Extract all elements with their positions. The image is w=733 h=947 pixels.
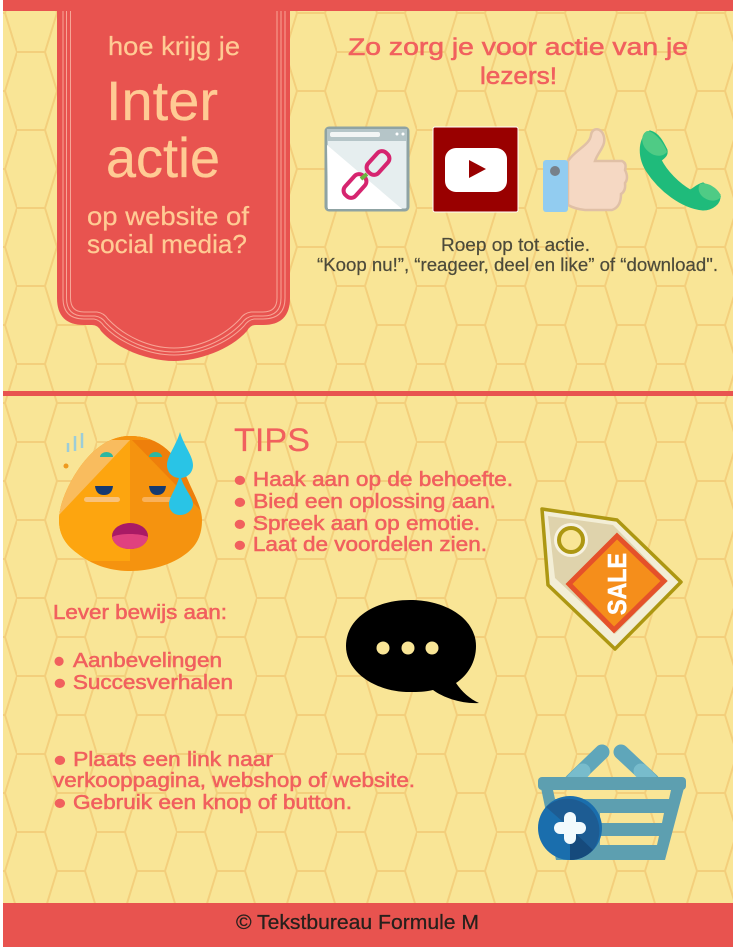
- heading: actie: Zo zorg je voor actie van je: [348, 34, 688, 61]
- heading: actie: [348, 34, 688, 90]
- copyright: © Tekstbureau Formule M: [236, 912, 479, 934]
- icon: sale tag: [542, 509, 681, 649]
- link text: ● Gebruik een knop of button.: [53, 792, 352, 814]
- icon: speech bubble: [346, 600, 479, 703]
- caption: roep op tot actie: Roep op tot actie.: [441, 235, 590, 255]
- link text: verkooppagina, webshop of website.: [53, 770, 415, 792]
- caption: roep op tot actie: [317, 235, 718, 275]
- top bar: [3, 0, 733, 11]
- banner heading: hoe krijg je: [108, 31, 240, 61]
- banner heading: op website of: [87, 201, 250, 231]
- icon: sale tag: SALE: [602, 553, 632, 615]
- section divider: [3, 391, 733, 396]
- icon: shopping basket: [538, 752, 686, 860]
- proof text: ● Succesverhalen: [53, 672, 233, 694]
- footer: [3, 903, 733, 947]
- proof text: Lever bewijs aan:: [53, 602, 227, 624]
- proof text: [53, 602, 233, 694]
- banner: [57, 11, 290, 361]
- proof text: Aanbevelingen: [73, 650, 222, 672]
- icon: thumbs up: [543, 129, 627, 212]
- tips list: ● Spreek aan op emotie.: [233, 513, 480, 535]
- caption: roep op tot actie: “Koop nu!”, “reageer, deel en like” of “download".: [317, 255, 718, 275]
- banner heading: social media?: [87, 229, 247, 259]
- link text: [53, 749, 415, 814]
- tips heading: TIPS: [234, 422, 310, 458]
- icon: phone: [641, 131, 721, 209]
- banner heading: [87, 31, 250, 259]
- tips list: [233, 469, 513, 556]
- icon: sweating face: [55, 430, 205, 571]
- tips list: ● Laat de voordelen zien.: [233, 534, 487, 556]
- link text: ● Plaats een link naar: [53, 749, 273, 771]
- tips list: ● Bied een oplossing aan.: [233, 491, 496, 513]
- banner heading: Inter: [106, 69, 218, 132]
- tips list: ● Haak aan op de behoefte.: [233, 469, 513, 491]
- tips: [233, 422, 513, 556]
- banner heading: actie: [106, 126, 220, 189]
- icon: video play: [433, 127, 518, 212]
- icon: browser link: [326, 128, 408, 210]
- heading: actie: lezers!: [480, 63, 557, 90]
- proof text: ●: [53, 650, 65, 672]
